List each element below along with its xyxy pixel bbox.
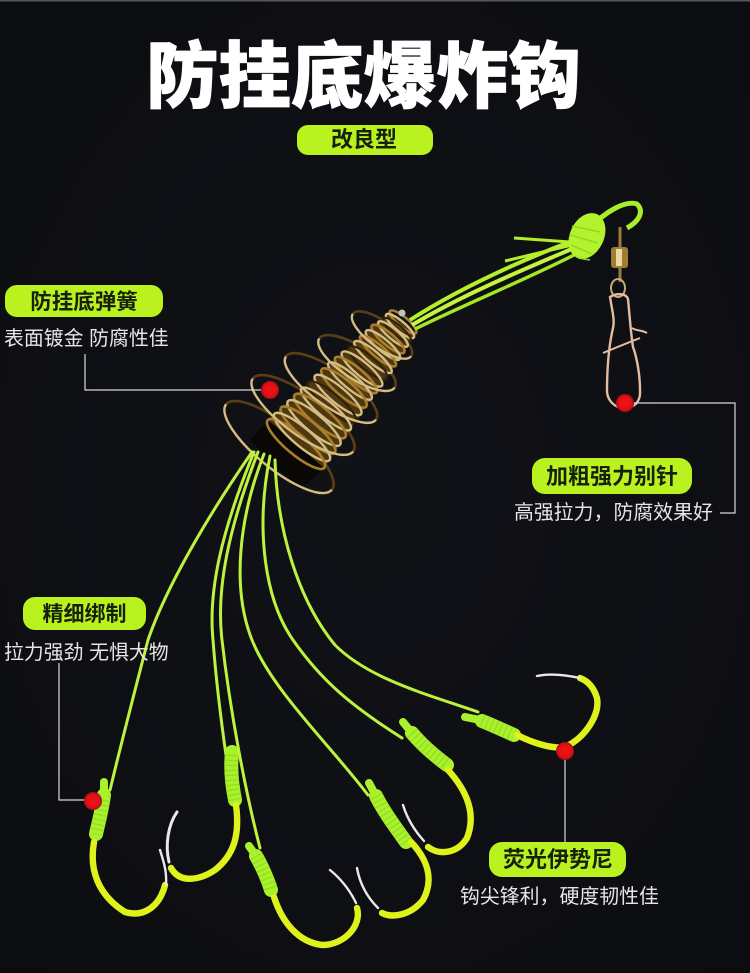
callout: anti-snag spring: 防挂底弹簧	[30, 289, 138, 314]
hook 5 with line	[263, 456, 471, 852]
callout: fine binding	[4, 597, 169, 810]
badge: improved type	[297, 125, 433, 155]
callout: snap pin: 加粗强力别针	[546, 464, 678, 489]
top braid, knot and loop	[410, 203, 640, 329]
hook 1 with line	[93, 452, 252, 913]
title: 防挂底爆炸钩	[146, 37, 581, 118]
callout: fluorescent iseni hook	[460, 742, 659, 908]
hook 2 with line	[167, 452, 254, 879]
hook 3 with line	[220, 452, 358, 945]
callout: anti-snag spring: 表面镀金 防腐性佳	[4, 327, 169, 350]
callout: anti-snag spring	[4, 285, 279, 399]
callout: fine binding: 精细绑制	[42, 603, 126, 626]
callout: fluorescent iseni hook: 荧光伊势尼	[503, 847, 613, 872]
swivel and snap pin	[603, 227, 647, 408]
hook 4 with line	[240, 454, 429, 915]
callout: snap pin: 高强拉力，防腐效果好	[514, 501, 713, 524]
callout: fine binding: 拉力强劲 无惧大物	[4, 641, 169, 664]
callout: snap pin	[514, 394, 735, 524]
spring cage	[212, 303, 419, 507]
hook 6 with line	[275, 460, 597, 747]
badge: improved type: 改良型	[331, 127, 397, 152]
callout: fluorescent iseni hook: 钩尖锋利，硬度韧性佳	[460, 885, 659, 908]
